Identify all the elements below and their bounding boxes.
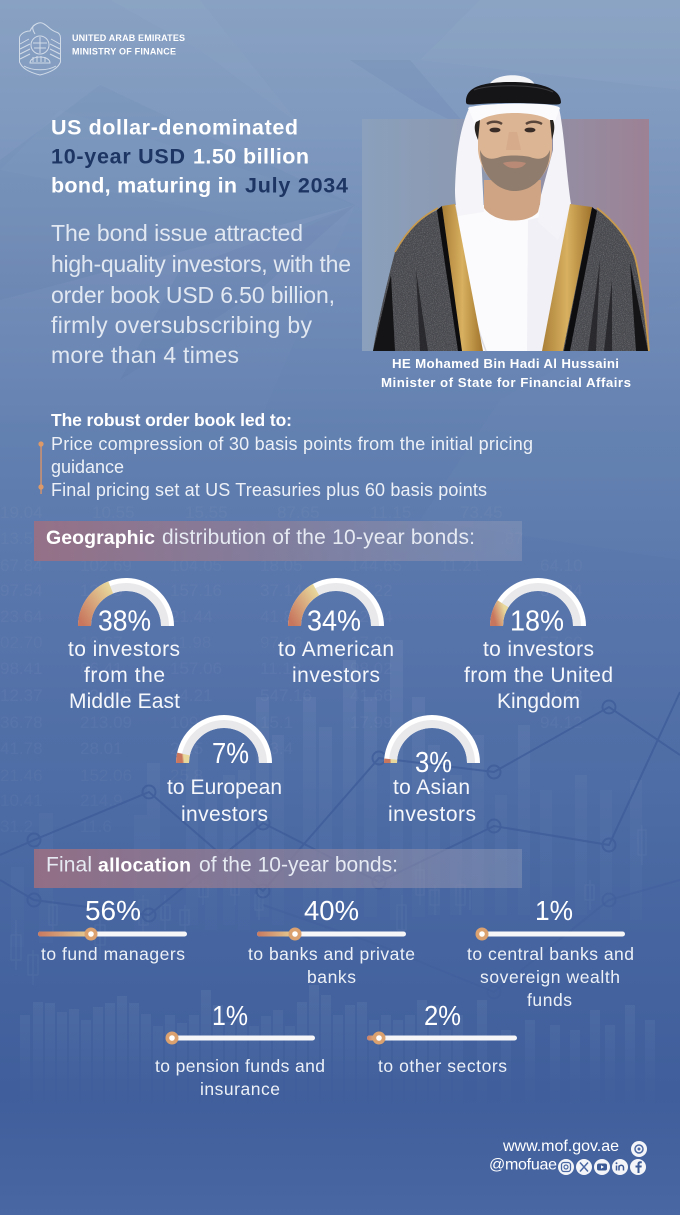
heading: geographic distribution: distribution of the 10-year bonds: xyxy=(162,526,475,549)
background: faint number grid: 11.18 xyxy=(260,659,301,678)
gauge: 3% Asian xyxy=(388,722,476,826)
heading: final allocation xyxy=(34,849,522,888)
background: faint number grid: 12.37 xyxy=(0,686,43,705)
gauge: 18% United Kingdom: 18% xyxy=(510,606,564,638)
organisation name xyxy=(72,33,185,56)
gauge: 38% Middle East xyxy=(68,585,180,713)
background: faint number grid: 10.41 xyxy=(0,791,43,810)
background: faint number grid: 224.55 xyxy=(80,686,132,705)
background: faint number grid: 11.21 xyxy=(440,556,481,575)
background: bar chart xyxy=(11,640,655,1120)
portrait caption: HE Mohamed Bin Hadi Al Hussaini xyxy=(392,356,619,371)
background: faint number grid: 11.98 xyxy=(170,633,211,652)
background: faint number grid: 97.16 xyxy=(260,633,303,652)
slider: 2% other sectors: 2% xyxy=(424,1000,461,1031)
gauge: 7% European xyxy=(167,722,282,826)
slider: 56% fund managers xyxy=(38,895,187,964)
background: faint number grid: 15.1 xyxy=(260,713,293,732)
background: faint number grid: 152.06 xyxy=(80,766,132,785)
gauge: 38% Middle East: 38% xyxy=(98,606,151,638)
intro paragraph: The bond issue attracted xyxy=(51,220,303,246)
heading: geographic distribution xyxy=(34,521,522,561)
slider: 1% central banks xyxy=(467,895,634,1010)
gauge: 34% American xyxy=(278,585,394,687)
background: faint number grid: 157.16 xyxy=(170,581,222,600)
icon: youtube xyxy=(594,1159,610,1175)
order book bullet list: Price compression of 30 basis points from the initial pricing xyxy=(51,434,533,454)
slider: 1% pension funds: insurance xyxy=(200,1079,280,1099)
intro paragraph: order book USD 6.50 billion, xyxy=(51,282,335,308)
title: bond, maturing in xyxy=(51,174,237,198)
title: July 2034 xyxy=(245,174,348,198)
slider: 40% banks: banks xyxy=(307,967,356,987)
title: 1.50 billion xyxy=(193,144,309,168)
gauge: 38% Middle East: from the xyxy=(84,664,165,687)
slider: 1% pension funds: to pension funds and xyxy=(155,1056,325,1076)
background: faint number grid: 98.02 xyxy=(350,659,393,678)
intro paragraph: high-quality investors, with the xyxy=(51,251,351,277)
slider: 56% fund managers: to fund managers xyxy=(41,944,185,964)
heading: final allocation: allocation xyxy=(98,854,191,876)
black stripes xyxy=(437,206,463,351)
slider: 1% central banks: to central banks and xyxy=(467,944,634,964)
portrait caption: Minister of State for Financial Affairs xyxy=(381,375,631,390)
intro paragraph: more than 4 times xyxy=(51,342,239,368)
slider: 2% other sectors: to other sectors xyxy=(378,1056,507,1076)
neck xyxy=(484,180,541,221)
icon: linkedin xyxy=(612,1159,628,1175)
background: faint number grid: 31.2 xyxy=(0,817,33,836)
background: faint number grid: 73.45 xyxy=(460,503,503,522)
background: faint number grid: 28.5 xyxy=(170,739,203,758)
background: faint number grid: 124.5 xyxy=(80,581,123,600)
gauge: 18% United Kingdom: Kingdom xyxy=(497,690,580,713)
slider: 40% banks: 40% xyxy=(304,895,359,926)
intro paragraph: firmly oversubscribing by xyxy=(51,312,312,338)
footer: website and handle: @mofuae xyxy=(489,1156,557,1174)
gold bands xyxy=(442,204,483,351)
robe xyxy=(373,209,649,351)
background: faint number grid: 157.06 xyxy=(170,659,222,678)
order book bullet list xyxy=(51,410,533,500)
gauge: 34% American: 34% xyxy=(307,606,361,638)
footer: website and handle: www.mof.gov.ae xyxy=(502,1138,619,1155)
background: faint number grid: 37.14 xyxy=(260,581,303,600)
background: faint number grid: 21.46 xyxy=(0,766,43,785)
background: faint number grid: 76.22 xyxy=(350,581,393,600)
gauge: 3% Asian: investors xyxy=(388,803,476,826)
background: faint number grid: 97.54 xyxy=(0,581,43,600)
background: faint number grid: 213.09 xyxy=(80,713,132,732)
background: faint number grid: 02.70 xyxy=(0,633,43,652)
background: faint number grid: 13.5 xyxy=(0,529,33,548)
slider: 1% central banks: funds xyxy=(527,990,572,1010)
slider: 56% fund managers: 56% xyxy=(85,895,141,926)
heading: final allocation: Final xyxy=(46,854,92,876)
background: faint number grid: 25.8 xyxy=(170,766,203,785)
background: faint number grid: 33.24 xyxy=(540,581,583,600)
background: faint number grid: 98.41 xyxy=(0,659,43,678)
icon: instagram xyxy=(558,1159,574,1175)
slider: 2% other sectors xyxy=(367,1000,517,1076)
background: faint number grid: 18.05 xyxy=(260,556,303,575)
background: faint number grid: 12.54 xyxy=(350,607,393,626)
portrait of the minister xyxy=(373,75,649,351)
background: faint number grid: 28.01 xyxy=(80,739,123,758)
background: faint number grid: 94.12 xyxy=(540,713,583,732)
gauge: 34% American: to American xyxy=(278,638,394,661)
cap and agal xyxy=(489,75,535,85)
background: faint number grid: 67.84 xyxy=(0,556,43,575)
background: faint number grid: 547.16 xyxy=(260,686,312,705)
gauge: 18% United Kingdom: from the United xyxy=(464,664,613,687)
background: faint number grid: 21.68 xyxy=(540,686,583,705)
background: faint number grid: 19.04 xyxy=(0,503,43,522)
slider: 40% banks xyxy=(248,895,415,987)
background: faint number grid: 19.67 xyxy=(80,633,123,652)
slider: 1% central banks: sovereign wealth xyxy=(480,967,620,987)
background: faint number grid: 102.69 xyxy=(80,556,132,575)
order book bullet list: Final pricing set at US Treasuries plus 60 basis points xyxy=(51,480,487,500)
background: faint number grid: 11.6 xyxy=(80,817,112,836)
gauge: 7% European: investors xyxy=(181,803,268,826)
title: 10-year USD xyxy=(51,144,185,168)
background: faint number grid: 144.65 xyxy=(350,556,402,575)
background: faint number grid: 104.05 xyxy=(170,556,222,575)
background: faint number grid: 21.44 xyxy=(170,607,213,626)
background: faint number grid: 13.4 xyxy=(260,739,293,758)
organisation name: MINISTRY OF FINANCE xyxy=(72,46,176,56)
gauge: 7% European: 7% xyxy=(212,738,249,770)
background: line charts xyxy=(0,692,680,998)
heading: final allocation: of the 10-year bonds: xyxy=(199,854,398,876)
footer: website and handle xyxy=(489,1138,619,1174)
timeline marker xyxy=(38,441,44,494)
order book bullet list: The robust order book led to: xyxy=(51,410,292,430)
title: US dollar-denominated xyxy=(51,116,298,140)
gauge: 3% Asian: to Asian xyxy=(393,776,470,799)
slider: 40% banks: to banks and private xyxy=(248,944,415,964)
background: candlesticks xyxy=(11,825,646,985)
heading: geographic distribution: Geographic xyxy=(46,527,155,549)
gauge: 34% American: investors xyxy=(292,664,380,687)
background: faint number grid: 57.60 xyxy=(540,633,583,652)
background: faint number grid: 109.1 xyxy=(170,713,213,732)
thobe xyxy=(452,205,572,351)
icon: threads xyxy=(631,1141,647,1157)
background: faint number grid: 214.9 xyxy=(80,791,123,810)
icon: X xyxy=(576,1159,592,1175)
order book bullet list: guidance xyxy=(51,457,124,477)
ghutra xyxy=(455,106,484,216)
background: faint number grid: 17.02 xyxy=(350,633,393,652)
intro paragraph xyxy=(51,220,351,368)
slider: 1% pension funds xyxy=(155,1000,325,1099)
background: faint number grid: 87.65 xyxy=(277,503,320,522)
background: faint number grid: .87 xyxy=(500,529,524,548)
background: faint number grid: 17.99 xyxy=(350,713,393,732)
background: faint number grid: 34.21 xyxy=(170,686,213,705)
organisation name: UNITED ARAB EMIRATES xyxy=(72,33,185,43)
background: faint number grid: 64.10 xyxy=(540,556,583,575)
background: faint number grid: 41.84 xyxy=(260,607,303,626)
background: faint number grid: 15.55 xyxy=(185,503,228,522)
background: faint number grid: 10.55 xyxy=(92,503,135,522)
gauge: 38% Middle East: Middle East xyxy=(69,690,180,713)
background: faint number grid: 11.15 xyxy=(370,503,411,522)
background: faint number grid xyxy=(0,503,583,836)
portrait caption xyxy=(381,356,631,390)
background: faint number grid: 41.78 xyxy=(0,739,43,758)
background: faint number grid: 36.78 xyxy=(0,713,43,732)
gauge: 18% United Kingdom: to investors xyxy=(483,638,594,661)
icon: facebook xyxy=(630,1159,646,1175)
background: faint number grid: 86.41 xyxy=(80,659,123,678)
gauge: 38% Middle East: to investors xyxy=(68,638,180,661)
gauge: 3% Asian: 3% xyxy=(415,747,452,779)
gauge: 18% United Kingdom xyxy=(464,584,613,713)
background: faint number grid: 41.66 xyxy=(350,686,393,705)
slider: 1% pension funds: 1% xyxy=(212,1000,248,1031)
logo: UAE emblem xyxy=(20,23,60,75)
panel: portrait backdrop xyxy=(362,119,649,351)
background: faint number grid: 23.64 xyxy=(0,607,43,626)
gauge: 7% European: to European xyxy=(167,776,282,799)
face xyxy=(478,113,552,190)
title xyxy=(51,116,348,198)
slider: 1% central banks: 1% xyxy=(535,895,573,926)
